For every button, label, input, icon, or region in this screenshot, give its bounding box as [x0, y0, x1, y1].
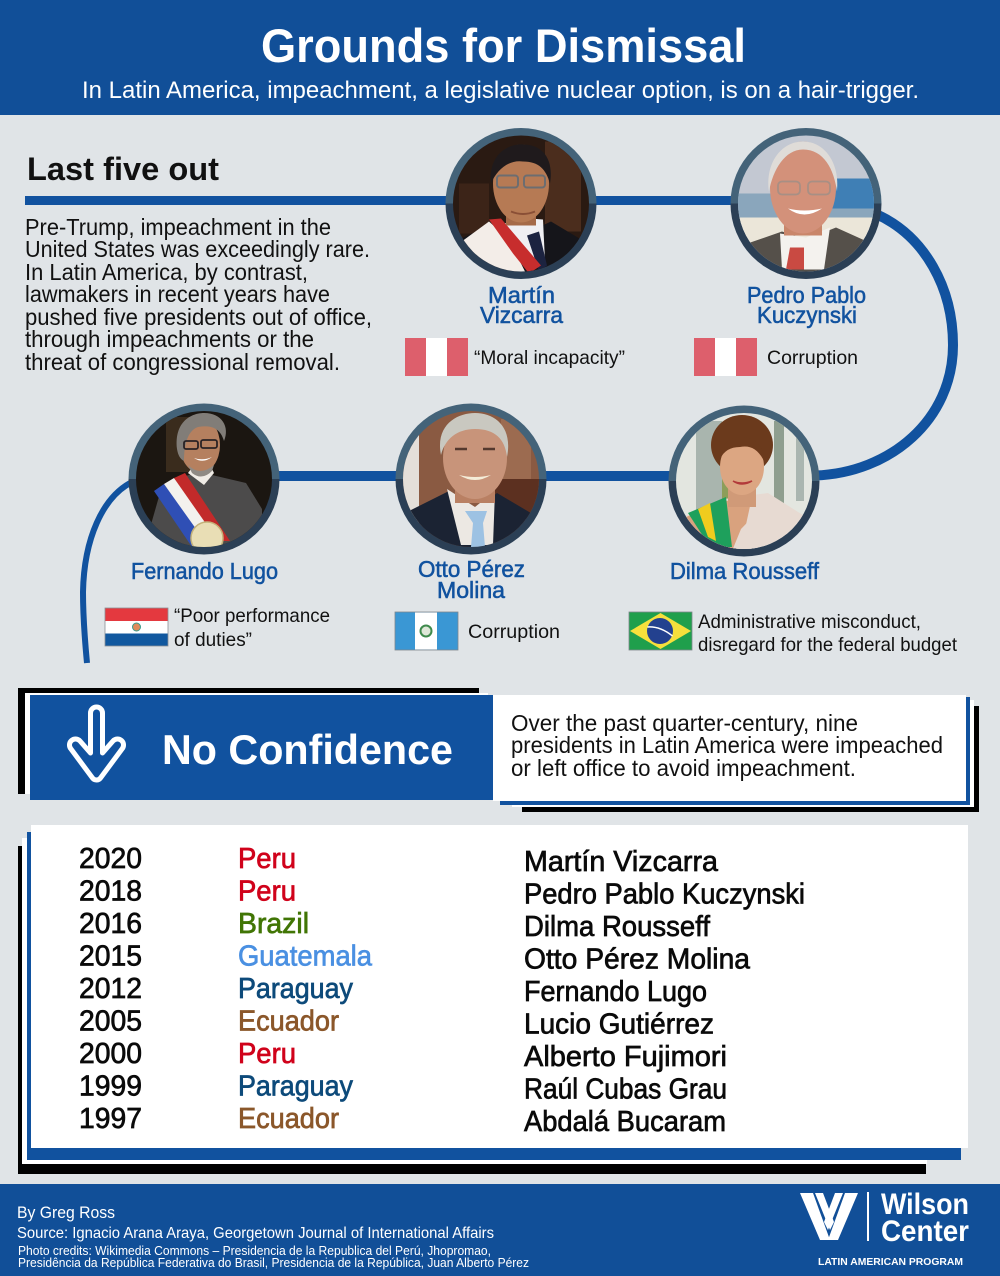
- heading: No Confidence: [162, 726, 453, 773]
- reason: Corruption: [468, 621, 560, 643]
- countries column: [238, 843, 373, 1135]
- portrait: Otto Pérez Molina: [396, 404, 546, 554]
- name: [480, 282, 563, 328]
- panel: no confidence summary: [493, 695, 979, 812]
- name: Molina: [437, 577, 505, 603]
- section heading: last five out: Last five out: [27, 151, 219, 187]
- presidents column: Otto Pérez Molina: [524, 944, 751, 976]
- flag: Paraguay: [105, 608, 168, 646]
- countries column: Paraguay: [238, 1070, 353, 1102]
- intro text block: Pre-Trump, impeachment in the: [25, 214, 331, 240]
- photo credits: Presidência da República Federativa do Brasil, Presidencia de la República, Juan Alberto Pérez: [18, 1256, 529, 1270]
- portrait: Martín Vizcarra: [446, 128, 596, 279]
- years column: 2000: [79, 1038, 142, 1070]
- reason: Administrative misconduct,: [698, 611, 921, 633]
- reason: of duties”: [174, 629, 252, 651]
- name: Vizcarra: [480, 302, 563, 328]
- reason: [174, 605, 330, 651]
- logo: Wilson Center: Center: [881, 1215, 969, 1248]
- profile: Pedro Pablo Kuczynski: [694, 282, 866, 376]
- source: Source: Ignacio Arana Araya, Georgetown Journal of International Affairs: [17, 1225, 494, 1242]
- summary text: or left office to avoid impeachment.: [511, 755, 856, 781]
- intro text block: pushed five presidents out of office,: [25, 304, 372, 330]
- byline: By Greg Ross: [17, 1204, 115, 1222]
- footer: [0, 1184, 1000, 1276]
- countries column: Brazil: [238, 908, 309, 940]
- profile: Dilma Rousseff: [629, 558, 958, 656]
- presidents column: Dilma Rousseff: [524, 911, 711, 943]
- header banner: [0, 0, 1000, 115]
- reason: “Moral incapacity”: [474, 347, 625, 369]
- years column: 1999: [79, 1070, 142, 1102]
- intro text block: lawmakers in recent years have: [25, 281, 330, 307]
- reason: “Poor performance: [174, 605, 330, 627]
- subtitle: In Latin America, impeachment, a legislative nuclear option, is on a hair-trigger.: [82, 77, 919, 104]
- years column: 2005: [79, 1006, 142, 1038]
- panel: impeachment table: [18, 825, 968, 1174]
- presidents column: Fernando Lugo: [524, 976, 707, 1008]
- years column: 1997: [79, 1103, 142, 1135]
- reason: Corruption: [767, 347, 858, 369]
- panel: no confidence banner: [18, 688, 493, 800]
- portrait: Pedro Pablo Kuczynski: [730, 128, 882, 279]
- name: Pedro Pablo: [747, 282, 866, 308]
- name: Otto Pérez: [418, 556, 525, 582]
- summary text: presidents in Latin America were impeached: [511, 732, 943, 758]
- name: Martín: [488, 282, 555, 308]
- portrait: Fernando Lugo: [128, 404, 280, 554]
- countries column: Peru: [238, 1038, 296, 1070]
- years column: 2020: [79, 843, 142, 875]
- presidents column: Martín Vizcarra: [524, 846, 719, 878]
- presidents column: [524, 846, 805, 1138]
- logo: Wilson Center: LATIN AMERICAN PROGRAM: [818, 1257, 963, 1268]
- profile: Fernando Lugo: [105, 558, 330, 651]
- profile: Martín Vizcarra: [405, 282, 625, 376]
- years column: 2012: [79, 973, 142, 1005]
- years column: 2018: [79, 876, 142, 908]
- countries column: Guatemala: [238, 940, 373, 972]
- title: Grounds for Dismissal: [261, 19, 746, 72]
- flag: Peru: [405, 338, 468, 376]
- logo: Wilson Center: [800, 1188, 969, 1268]
- summary text: [511, 710, 943, 781]
- presidents column: Pedro Pablo Kuczynski: [524, 878, 805, 910]
- presidents column: Alberto Fujimori: [524, 1041, 727, 1073]
- photo credits: [18, 1244, 529, 1270]
- name: Kuczynski: [757, 302, 857, 328]
- intro text block: threat of congressional removal.: [25, 349, 340, 375]
- countries column: Ecuador: [238, 1103, 339, 1135]
- flag: Brazil: [629, 612, 692, 650]
- photo credits: Photo credits: Wikimedia Commons – Presidencia de la Republica del Perú, Jhopromao,: [18, 1244, 491, 1258]
- years column: 2015: [79, 940, 142, 972]
- years column: 2016: [79, 908, 142, 940]
- portrait: Dilma Rousseff: [668, 406, 820, 556]
- name: Fernando Lugo: [131, 558, 278, 584]
- countries column: Ecuador: [238, 1006, 339, 1038]
- presidents column: Abdalá Bucaram: [524, 1106, 726, 1138]
- reason: [698, 611, 958, 656]
- name: [418, 556, 525, 603]
- countries column: Peru: [238, 843, 296, 875]
- reason: disregard for the federal budget: [698, 634, 958, 656]
- name: [747, 282, 866, 328]
- flag: Peru: [694, 338, 757, 376]
- countries column: Peru: [238, 876, 296, 908]
- intro text block: United States was exceedingly rare.: [25, 236, 370, 262]
- name: Dilma Rousseff: [670, 558, 820, 584]
- profile: Otto Pérez Molina: [395, 556, 560, 650]
- presidents column: Lucio Gutiérrez: [524, 1008, 714, 1040]
- logo: Wilson Center: Wilson: [881, 1188, 969, 1221]
- intro text block: through impeachments or the: [25, 326, 314, 352]
- icon: down arrow: [69, 707, 124, 780]
- flag: Guatemala: [395, 612, 458, 650]
- presidents column: Raúl Cubas Grau: [524, 1074, 727, 1106]
- timeline path connecting portraits: [25, 200, 953, 663]
- intro text block: [25, 214, 372, 375]
- intro text block: In Latin America, by contrast,: [25, 259, 308, 285]
- years column: [79, 843, 142, 1135]
- summary text: Over the past quarter-century, nine: [511, 710, 858, 736]
- countries column: Paraguay: [238, 973, 353, 1005]
